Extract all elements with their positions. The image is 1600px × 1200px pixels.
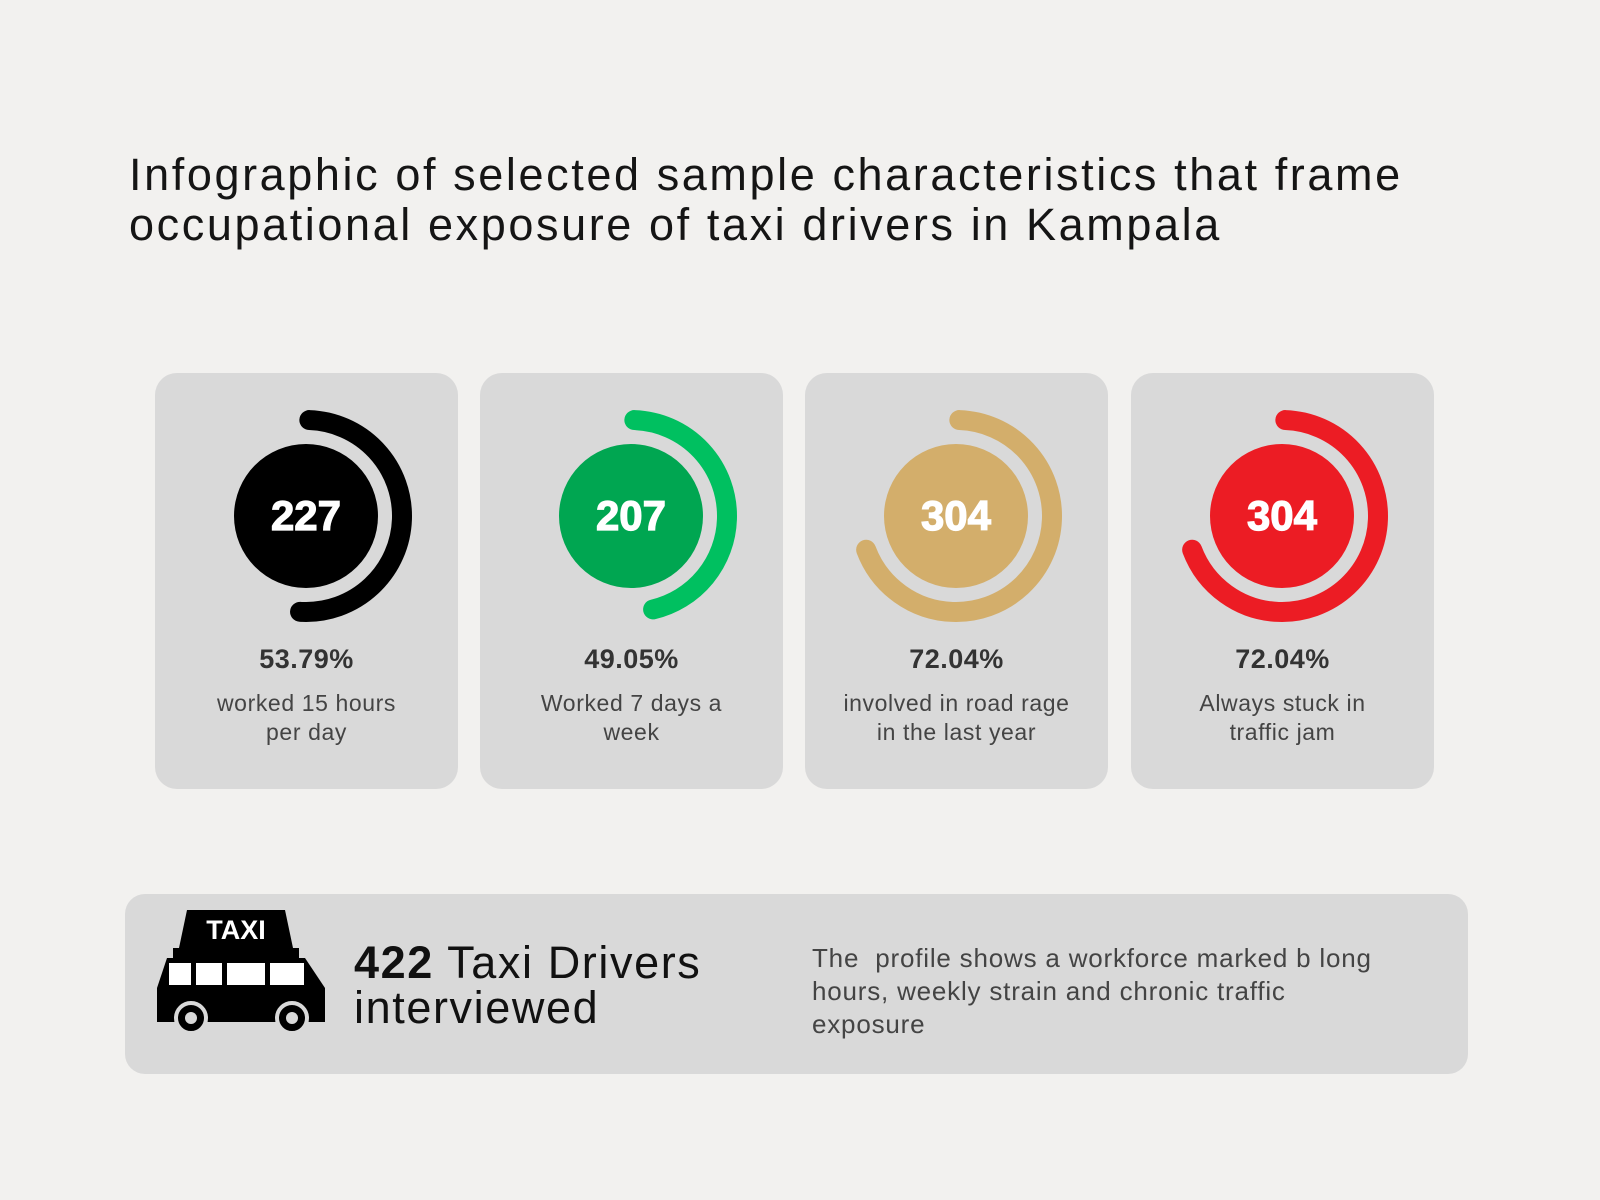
chart: donut 207: 207: [596, 492, 666, 539]
text: description: in the last year: [877, 719, 1036, 745]
text: headline: 422 Taxi Drivers: [354, 937, 701, 988]
chart: donut 304: 304: [921, 492, 992, 539]
text: stat: 72.04%: [1235, 644, 1330, 674]
text: description: worked 15 hours: [217, 690, 396, 716]
title: occupational exposure of taxi drivers in Kampala: [129, 199, 1222, 250]
text: stat: 53.79%: [259, 644, 354, 674]
text: description: [541, 690, 722, 745]
text: description: [1199, 690, 1366, 745]
chart: donut 304: 304: [1247, 492, 1318, 539]
text: stat: 49.05%: [584, 644, 679, 674]
text: description: traffic jam: [1230, 719, 1335, 745]
panel: card 1: [155, 373, 458, 789]
title: [129, 149, 1403, 250]
chart: donut 227: [234, 410, 412, 622]
text: description: per day: [266, 719, 347, 745]
text: headline: interviewed: [354, 982, 599, 1033]
panel: card 3: [805, 373, 1108, 789]
text: summary note: [812, 943, 1372, 1039]
text: description: Worked 7 days a: [541, 690, 722, 716]
chart: donut 304: [1182, 410, 1388, 622]
icon: taxi: TAXI: [206, 915, 266, 945]
text: description: Always stuck in: [1199, 690, 1366, 716]
text: summary note: hours, weekly strain and chronic traffic: [812, 976, 1286, 1006]
chart: donut 304: [856, 410, 1062, 622]
panel: card 4: [1131, 373, 1434, 789]
text: description: week: [603, 719, 660, 745]
chart: donut 227: 227: [271, 492, 341, 539]
panel: summary: [125, 894, 1468, 1074]
text: description: involved in road rage: [843, 690, 1070, 716]
text: description: [217, 690, 396, 745]
text: description: [843, 690, 1070, 745]
icon: taxi: [157, 910, 325, 1031]
text: summary note: exposure: [812, 1009, 925, 1039]
panel: card 2: [480, 373, 783, 789]
chart: donut 207: [559, 410, 737, 620]
text: summary note: The profile shows a workforce marked b long: [812, 943, 1372, 973]
text: stat: 72.04%: [909, 644, 1004, 674]
title: Infographic of selected sample characteristics that frame: [129, 149, 1403, 200]
text: headline: [354, 937, 701, 1033]
